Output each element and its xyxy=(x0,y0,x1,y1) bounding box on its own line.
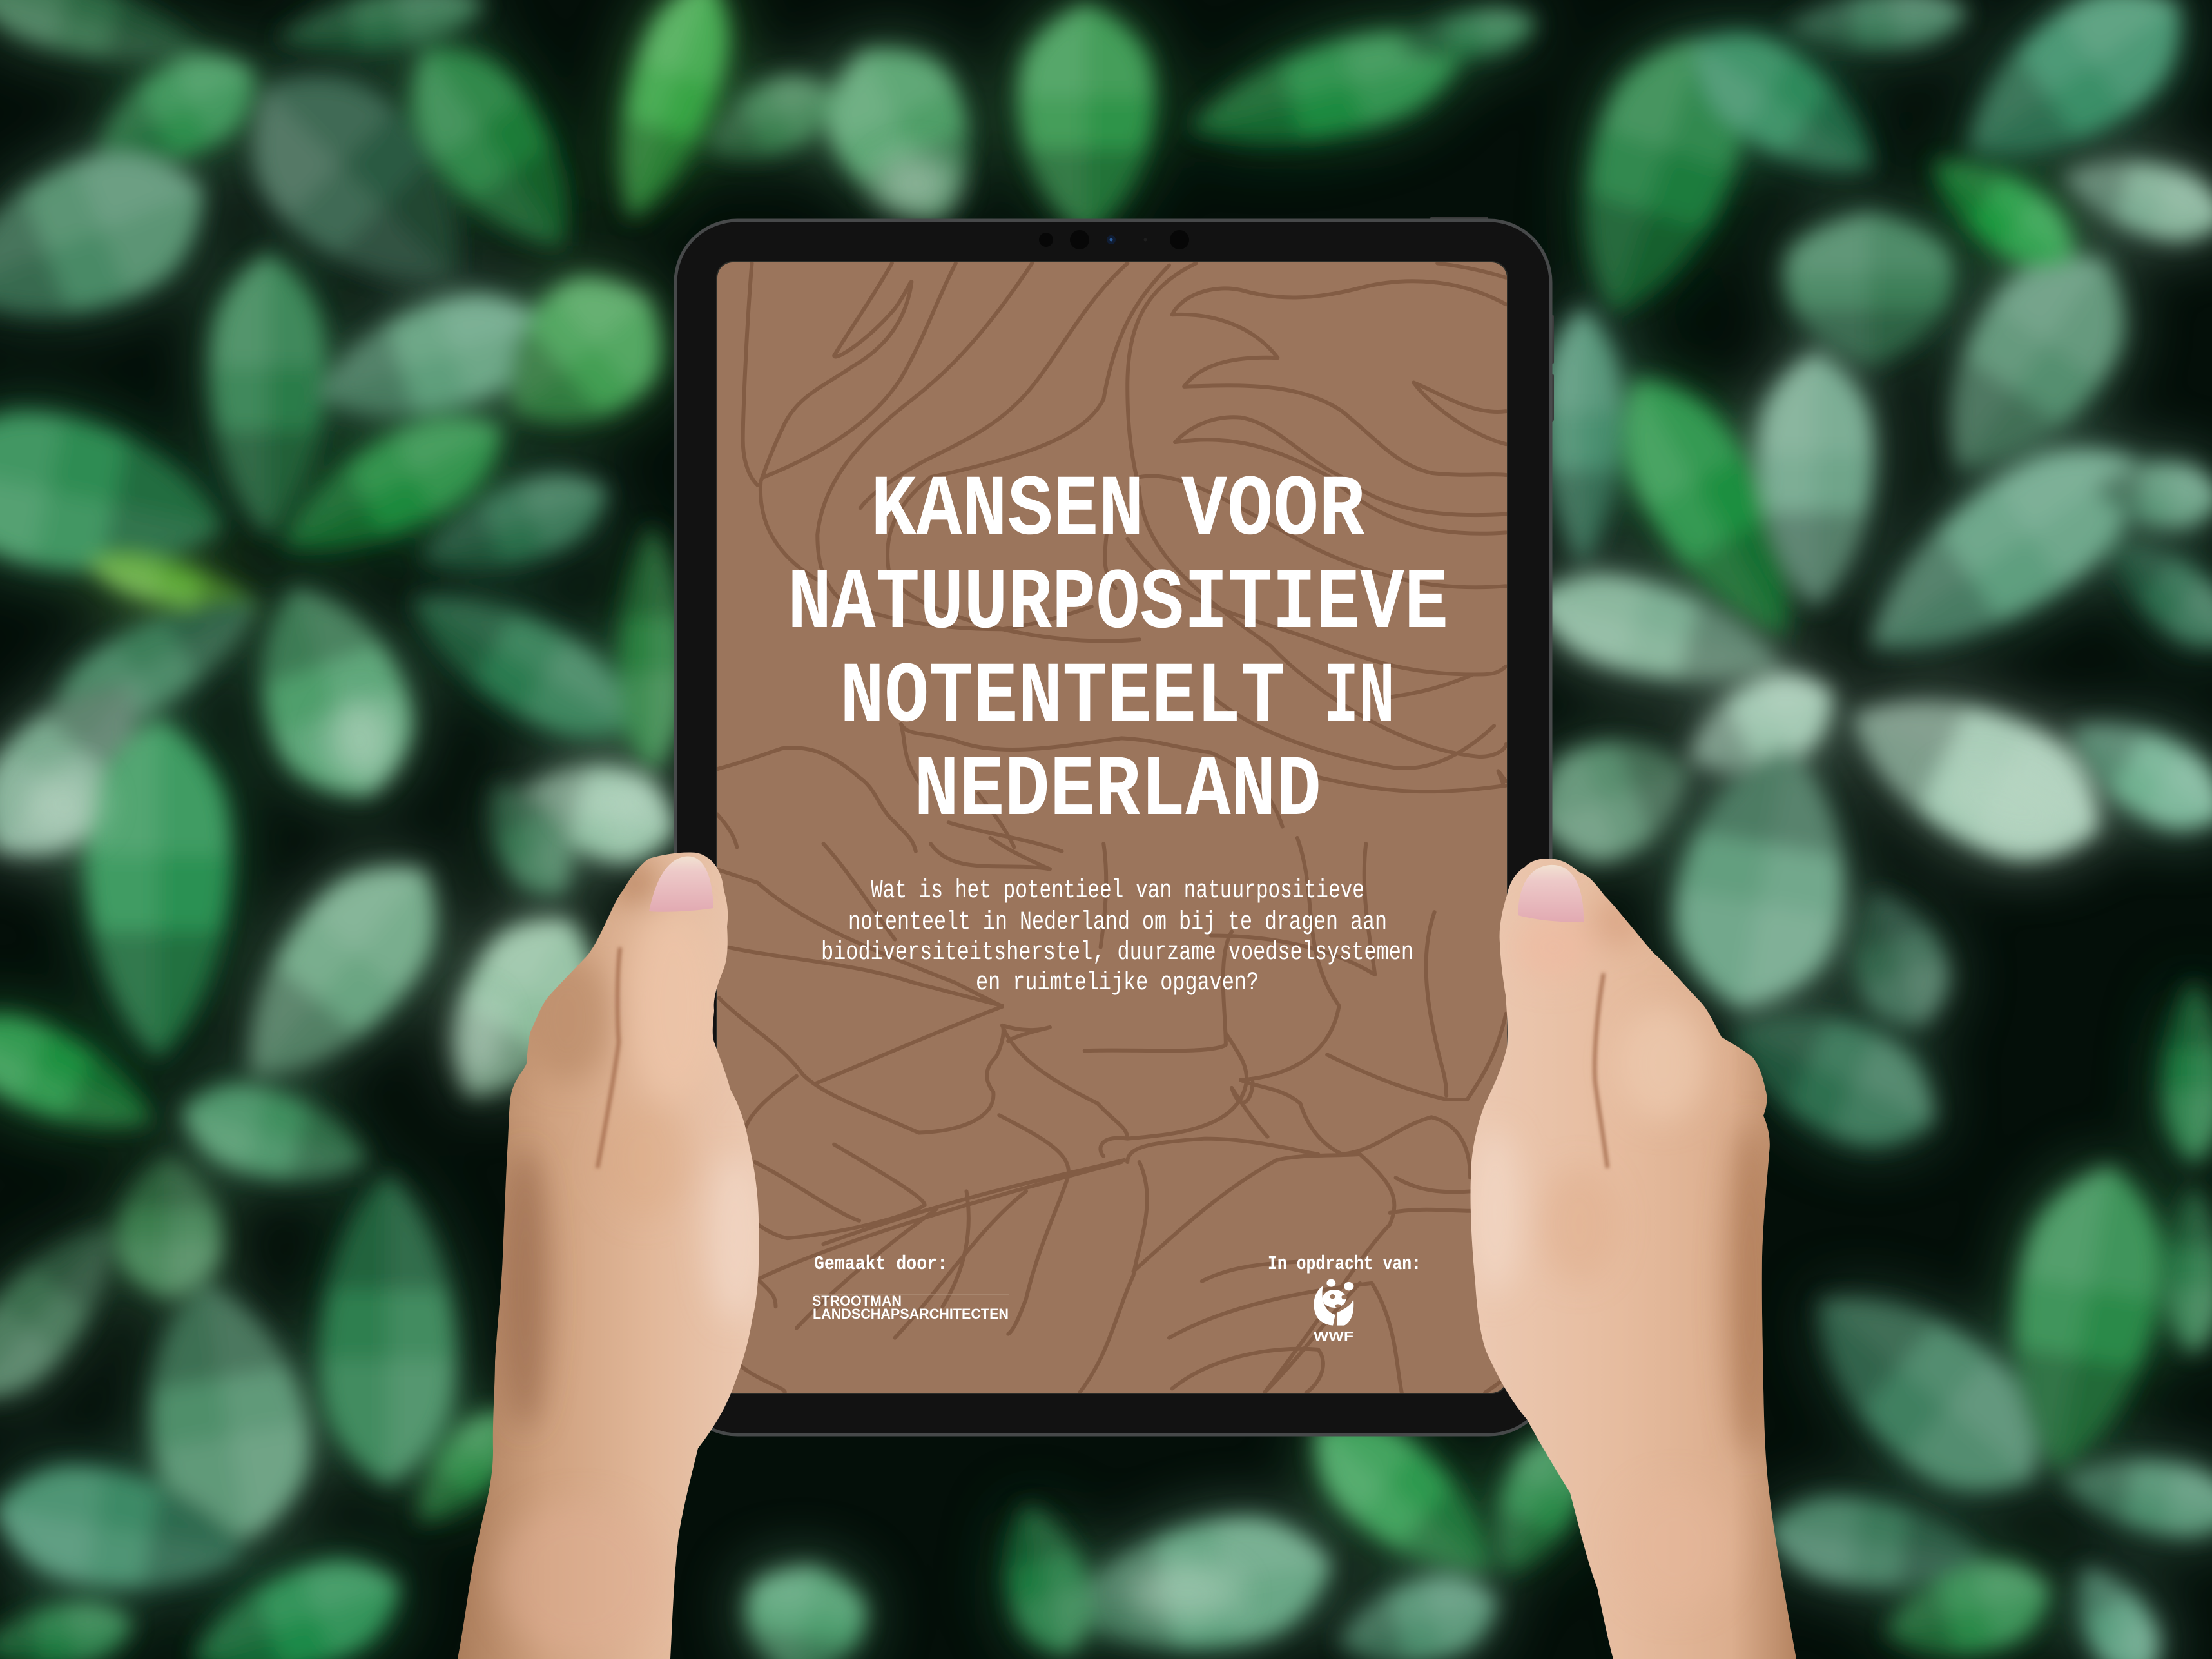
thumb crease xyxy=(597,947,620,1168)
left thumbnail xyxy=(649,857,713,912)
left hand xyxy=(458,852,764,1659)
title: VOOR xyxy=(1181,462,1365,560)
logo: Strootman Landschapsarchitecten xyxy=(812,1293,1009,1322)
logo: WWF panda xyxy=(1314,1279,1353,1344)
subtitle: notenteelt in Nederland om bij te dragen aan xyxy=(848,908,1387,937)
credit: commissioned by: In opdracht van: xyxy=(1268,1253,1421,1276)
credit: made by: Gemaakt door: xyxy=(814,1253,947,1276)
thumb crease xyxy=(1595,973,1607,1168)
title: NOTENTEELT xyxy=(840,649,1285,747)
credit: made by xyxy=(812,1253,1009,1322)
screen: report cover xyxy=(716,262,1507,1393)
subtitle: en ruimtelijke opgaven? xyxy=(976,969,1259,998)
subtitle: biodiversiteitsherstel, duurzame voedselsystemen xyxy=(821,938,1413,967)
hand shading xyxy=(1470,896,1772,1611)
logo: Strootman Landschapsarchitecten: STROOTMAN xyxy=(812,1293,902,1309)
title: KANSEN xyxy=(871,462,1144,560)
logo: Strootman Landschapsarchitecten: LANDSCHAPSARCHITECTEN xyxy=(813,1306,1009,1322)
screen edge xyxy=(716,261,1508,1394)
title: IN xyxy=(1323,649,1395,747)
credit: commissioned by xyxy=(1268,1253,1421,1344)
hand shading xyxy=(496,860,764,1656)
line drawing of leaves xyxy=(716,263,1506,1393)
tablet device xyxy=(675,217,1554,1435)
subtitle xyxy=(821,877,1413,998)
camera array xyxy=(1039,230,1189,249)
tablet body xyxy=(675,220,1551,1435)
side and top buttons xyxy=(1430,217,1554,422)
right thumbnail xyxy=(1518,865,1584,922)
logo: WWF panda: WWF xyxy=(1314,1330,1353,1344)
title: NEDERLAND xyxy=(914,742,1321,840)
title: NATUURPOSITIEVE xyxy=(788,556,1448,654)
title xyxy=(788,462,1448,840)
subtitle: Wat is het potentieel van natuurpositieve xyxy=(871,877,1364,906)
right hand xyxy=(1470,859,1796,1659)
